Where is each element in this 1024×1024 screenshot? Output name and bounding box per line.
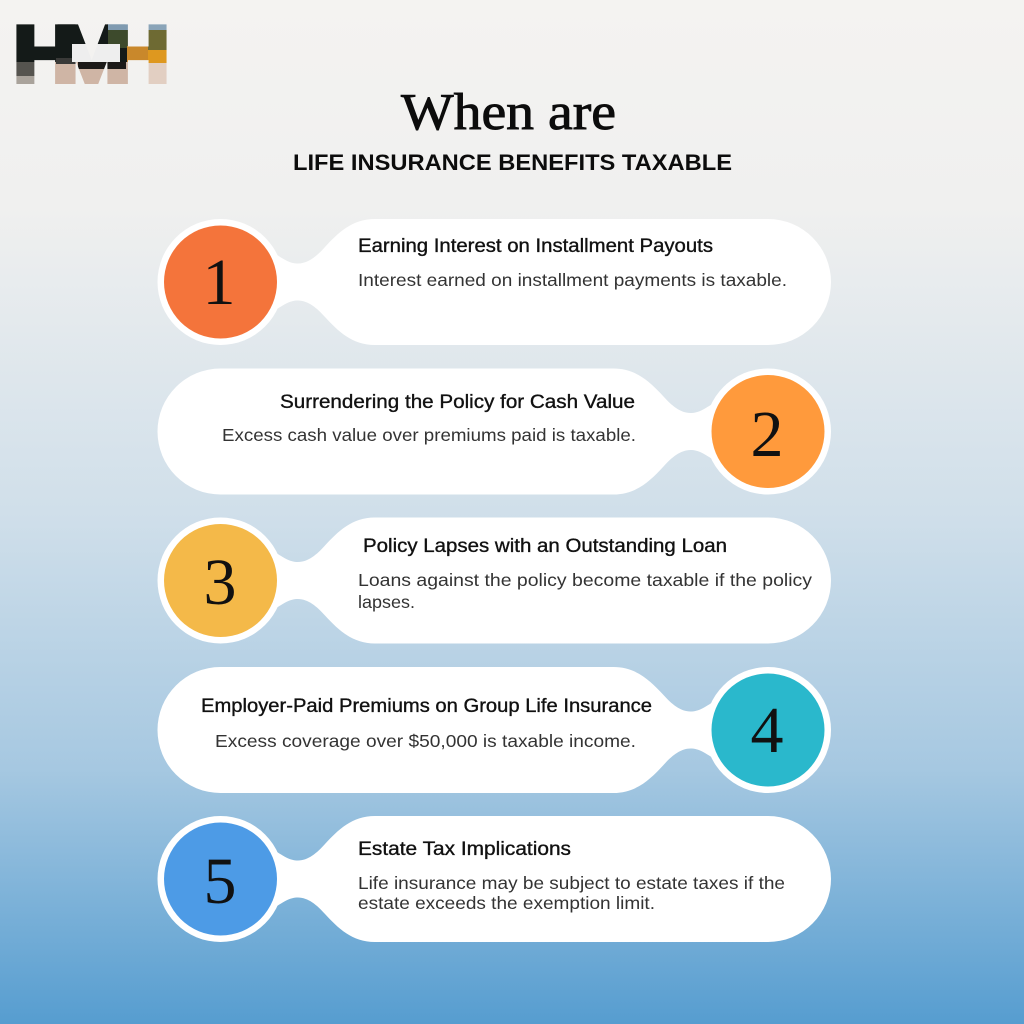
- logo: HMH with photo fill: [12, 10, 170, 100]
- panel: item 3: lapses.: [358, 592, 415, 612]
- panel: item 1: Interest earned on installment payments is taxable.: [358, 270, 787, 290]
- panel: item 3: [158, 518, 831, 644]
- panel: item 3: Policy Lapses with an Outstanding Loan: [363, 536, 727, 557]
- panel: item 3: Loans against the policy become taxable if the policy: [358, 570, 812, 590]
- panel: item 5: [158, 816, 831, 942]
- panel: item 1: 1: [202, 246, 236, 319]
- panel: item 1: Earning Interest on Installment Payouts: [358, 236, 713, 257]
- panel: item 5: Estate Tax Implications: [358, 839, 571, 860]
- panel: item 5: estate exceeds the exemption limit.: [358, 893, 655, 913]
- logo: HMH with photo fill: H: [12, 10, 80, 100]
- panel: item 5: Life insurance may be subject to estate taxes if the: [358, 873, 785, 893]
- title: When are: [401, 84, 616, 141]
- panel: item 5: 5: [204, 845, 236, 918]
- panel: item 2: Surrendering the Policy for Cash Value: [280, 392, 635, 413]
- panel: item 1: [158, 219, 831, 345]
- panel: item 3: 3: [204, 546, 236, 619]
- panel: item 4: Excess coverage over $50,000 is taxable income.: [215, 731, 636, 751]
- panel: item 2: 2: [750, 398, 784, 471]
- logo: HMH with photo fill: M: [51, 10, 132, 100]
- title: [293, 84, 732, 175]
- panel: item 4: [158, 667, 831, 793]
- title: LIFE INSURANCE BENEFITS TAXABLE: [293, 150, 732, 175]
- panel: item 2: Excess cash value over premiums paid is taxable.: [222, 425, 636, 445]
- panel: item 2: [158, 368, 831, 494]
- panel: item 4: 4: [750, 694, 784, 767]
- logo: HMH with photo fill: H: [104, 10, 170, 100]
- panel: item 4: Employer-Paid Premiums on Group Life Insurance: [201, 696, 652, 717]
